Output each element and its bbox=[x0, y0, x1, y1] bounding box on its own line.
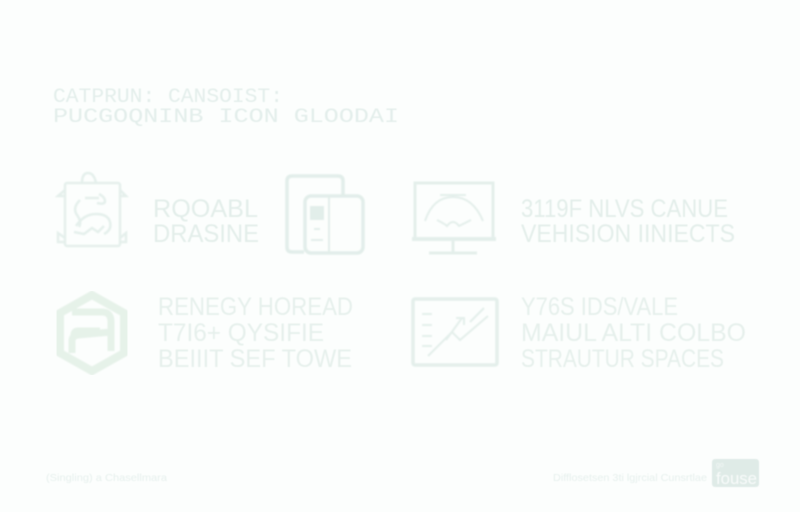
label: 3119f nlvs canue: VEHISION IINIECTS bbox=[521, 220, 735, 248]
label: renegy horead: T7I6+ QYSIFIE bbox=[158, 319, 324, 347]
label: y76s ids/vale bbox=[521, 293, 746, 373]
label: 3119f nlvs canue bbox=[521, 195, 735, 248]
label: renegy horead: RENEGY HOREAD bbox=[158, 293, 353, 321]
label: rqoabl drasine bbox=[153, 195, 259, 248]
label: rqoabl drasine: DRASINE bbox=[153, 220, 259, 248]
icon: map document bbox=[58, 173, 126, 246]
icon: devices bbox=[287, 176, 363, 253]
icon: hexagon badge bbox=[60, 295, 124, 371]
logo badge: go bbox=[716, 462, 724, 469]
label: 3119f nlvs canue: 3119F NLVS CANUE bbox=[521, 195, 728, 223]
label: rqoabl drasine: RQOABL bbox=[153, 195, 258, 223]
title: CATPRUN: CANSOIST: bbox=[53, 86, 283, 109]
title bbox=[53, 86, 399, 129]
footer right note: Difflosetsen 3ti lgjrcial Cunsrtlae bbox=[553, 472, 707, 484]
label: y76s ids/vale: STRAUTUR SPACES bbox=[521, 345, 724, 373]
icon: line chart bbox=[413, 299, 497, 365]
label: y76s ids/vale: Y76S IDS/VALE bbox=[521, 293, 678, 321]
icon: monitor gauge bbox=[412, 183, 496, 253]
label: renegy horead bbox=[158, 293, 353, 373]
logo badge bbox=[712, 459, 759, 488]
footer left note: (Singling) a Chasellmara bbox=[46, 472, 167, 484]
label: renegy horead: BEIIIT SEF TOWE bbox=[158, 345, 352, 373]
label: y76s ids/vale: MAIUL ALTI COLBO bbox=[521, 319, 746, 347]
title: PUCGOQNINB ICON GLOODAI bbox=[53, 106, 399, 129]
logo badge: fouse bbox=[716, 469, 757, 488]
